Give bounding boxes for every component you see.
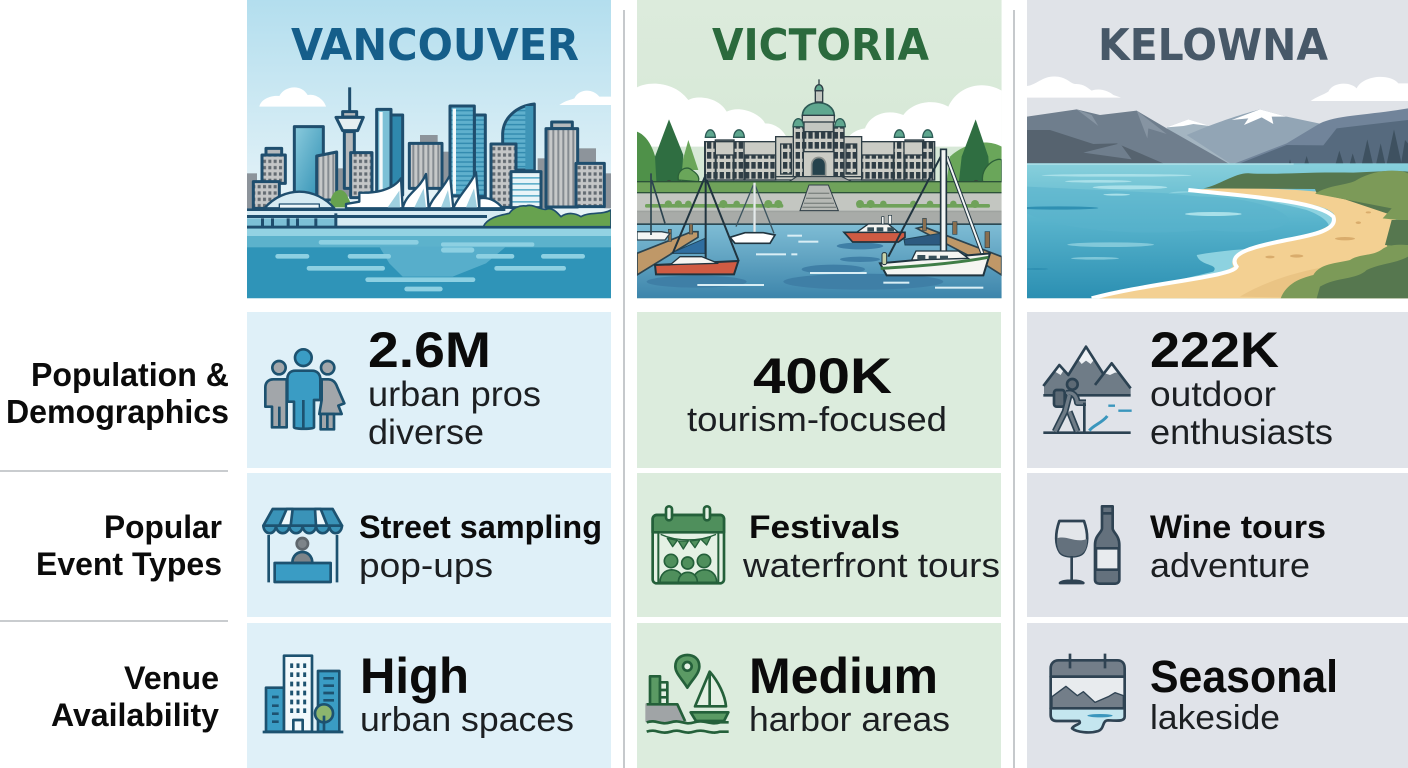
cell: Victoria population xyxy=(637,312,1001,468)
illustration: Victoria parliament and harbour xyxy=(637,0,1002,298)
left dock and boats xyxy=(637,232,698,275)
cell: Kelowna venue availability: Seasonal xyxy=(1150,651,1338,702)
cell: Vancouver event types xyxy=(247,473,611,617)
cell: Kelowna population: enthusiasts xyxy=(1150,413,1333,452)
icon: hiker and mountains xyxy=(1043,347,1132,433)
row label: Venue Availability: Availability xyxy=(51,697,219,733)
heading: Kelowna: KELOWNA xyxy=(1098,20,1328,71)
cell: Kelowna population xyxy=(1027,312,1408,468)
row label: Population & Demographics xyxy=(6,356,229,430)
cell: Victoria venue availability xyxy=(637,623,1001,768)
illustration: Vancouver skyline xyxy=(247,0,611,298)
icon: city buildings xyxy=(263,656,343,732)
row label: Venue Availability xyxy=(51,660,219,733)
cell: Victoria event types: waterfront tours xyxy=(742,547,1000,585)
cell: Victoria venue availability: harbor areas xyxy=(749,701,950,739)
icon: market stall xyxy=(263,509,342,582)
row label: Population & Demographics: Population & xyxy=(31,356,229,393)
cell: Victoria event types: Festivals xyxy=(749,509,900,545)
cell: Vancouver event types: pop-ups xyxy=(359,547,493,585)
row label: Venue Availability: Venue xyxy=(124,660,219,696)
cell: Victoria population: tourism-focused xyxy=(687,401,947,439)
cell: Kelowna population: 222K xyxy=(1150,322,1279,378)
cell: Vancouver event types: Street sampling xyxy=(359,509,602,545)
panel: Kelowna column xyxy=(1018,0,1408,768)
cell: Kelowna event types xyxy=(1027,473,1408,617)
cell: Kelowna population: outdoor xyxy=(1150,375,1276,414)
cell: Vancouver venue availability xyxy=(247,623,611,768)
beach xyxy=(1092,188,1408,300)
cell: Kelowna venue availability: lakeside xyxy=(1150,699,1280,737)
cell: Vancouver population: urban pros xyxy=(368,375,541,414)
heading: Vancouver: VANCOUVER xyxy=(291,20,579,71)
icon: wine glass and bottle xyxy=(1056,506,1119,584)
panel: Victoria column xyxy=(637,0,1002,768)
cell: Vancouver population xyxy=(247,312,611,468)
right dock and boats xyxy=(917,227,1002,275)
panel: Vancouver column xyxy=(247,0,611,768)
cell: Victoria event types xyxy=(637,473,1001,617)
cell: Vancouver population: 2.6M xyxy=(368,322,491,378)
green headland and shrubs xyxy=(1203,171,1408,213)
row label: Popular Event Types: Popular xyxy=(104,509,222,545)
cell: Victoria population: 400K xyxy=(753,348,892,404)
cell: Vancouver population: diverse xyxy=(368,413,484,452)
cell: Vancouver venue availability: urban spaces xyxy=(360,701,574,739)
cell: Kelowna event types: Wine tours xyxy=(1150,509,1326,545)
cell: Victoria venue availability: Medium xyxy=(749,648,938,704)
illustration: Kelowna lake and beach xyxy=(1018,0,1408,300)
parliament building xyxy=(705,79,935,180)
row label: Population & Demographics: Demographics xyxy=(6,393,229,430)
icon: group of people xyxy=(265,349,344,429)
shallows xyxy=(1169,191,1332,278)
icon: seasonal lakeside calendar xyxy=(1051,654,1125,732)
heading: Victoria: VICTORIA xyxy=(712,20,929,71)
icon: festival calendar xyxy=(653,506,724,583)
cell: Kelowna event types: adventure xyxy=(1150,547,1310,585)
row label: Popular Event Types xyxy=(36,509,222,582)
row label: Popular Event Types: Event Types xyxy=(36,546,222,582)
cell: Vancouver venue availability: High xyxy=(360,648,469,704)
icon: harbour with map pin and sailboat xyxy=(647,655,729,733)
cell: Kelowna venue availability xyxy=(1027,623,1408,768)
